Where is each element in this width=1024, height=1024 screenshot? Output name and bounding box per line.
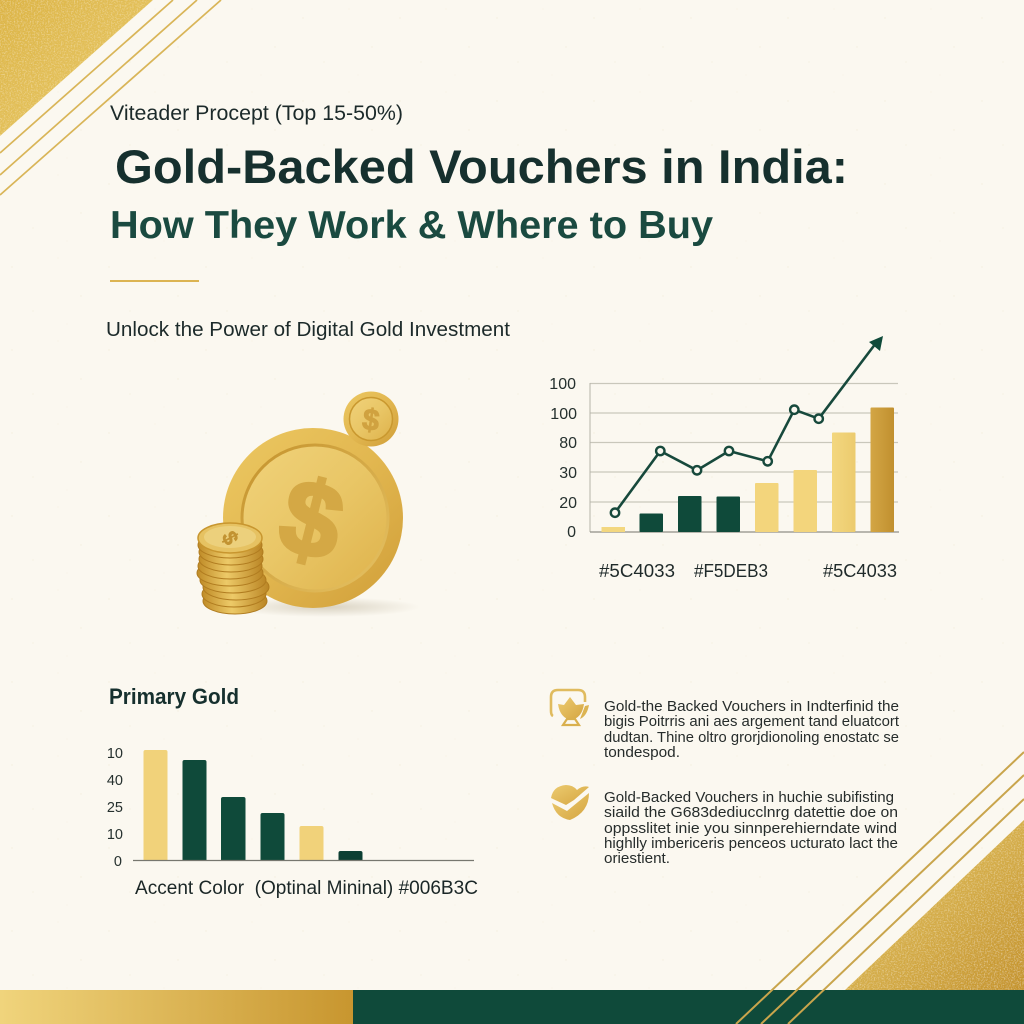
text block: second note: oriestient. [604, 851, 670, 867]
y-axis labels: 0 [114, 854, 122, 870]
text block: second note: highlly imbericeris penceos ucturato lact the [604, 836, 898, 852]
icon: large coin: $ [269, 456, 354, 584]
chart y-axis labels [549, 376, 577, 541]
y-axis labels: 10 [107, 746, 123, 762]
chart y-axis labels: 100 [550, 406, 577, 423]
icon: large coin [223, 428, 403, 608]
text block: first note: bigis Poitrris ani aes argement tand eluatcort [604, 714, 899, 730]
text block: second note: oppsslitet inie you sinnperehierndate wind [604, 821, 897, 837]
icon: small coin [344, 392, 398, 446]
text block: second note: siaild the G683dediucclnrg datettie doe on [604, 805, 898, 821]
top-left gold corner decoration [0, 0, 221, 195]
text block: first note [604, 699, 899, 761]
chart colour labels: #5C4033 [823, 561, 897, 581]
chart caption: Accent Color (Optinal Mininal) #006B3C [135, 878, 478, 899]
icon: small coin: $ [360, 403, 382, 438]
y-axis labels: 40 [107, 773, 123, 789]
line and bar chart [549, 336, 899, 581]
text block: second note: Gold-Backed Vouchers in huchie subifisting [604, 790, 894, 806]
chart colour labels: #F5DEB3 [694, 561, 768, 581]
chart gridlines and axis [590, 383, 899, 532]
subtitle: Unlock the Power of Digital Gold Investment [106, 318, 510, 341]
text block: first note: tondespod. [604, 745, 680, 761]
y-axis labels: 25 [107, 800, 123, 816]
chart y-axis labels: 100 [549, 376, 576, 393]
text block: second note [604, 790, 898, 867]
chart colour labels: #5C4033 [599, 561, 675, 581]
chart y-axis labels: 0 [567, 524, 576, 541]
chart y-axis labels: 20 [559, 495, 577, 512]
chart colour labels [599, 561, 897, 581]
y-axis labels [107, 746, 123, 870]
bottom bar [0, 990, 1024, 1024]
chart y-axis labels: 80 [559, 435, 577, 452]
y-axis labels: 10 [107, 827, 123, 843]
icon: coin stack [197, 523, 269, 614]
icon: gold coins [197, 392, 420, 617]
text block: first note: dudtan. Thine oltro grorjdionoling enostatc se [604, 730, 899, 746]
chart y-axis labels: 30 [559, 465, 577, 482]
bar chart: primary gold [107, 746, 474, 870]
icon: coin stack: $ [217, 528, 243, 549]
eyebrow line: Viteader Procept (Top 15-50%) [110, 101, 403, 125]
heading: primary gold: Primary Gold [109, 684, 239, 709]
icon: voucher with leaf [551, 690, 589, 725]
icon: round badge with check [551, 785, 589, 820]
bars [144, 750, 362, 860]
text block: first note: Gold-the Backed Vouchers in Indterfinid the [604, 699, 899, 715]
title [110, 140, 848, 247]
title: How They Work & Where to Buy [110, 204, 713, 247]
trend line with arrow [611, 336, 883, 517]
title: Gold-Backed Vouchers in India: [115, 140, 848, 193]
chart bars [602, 408, 894, 532]
bottom-right gold corner decoration [736, 752, 1024, 1024]
title rule [110, 280, 199, 282]
